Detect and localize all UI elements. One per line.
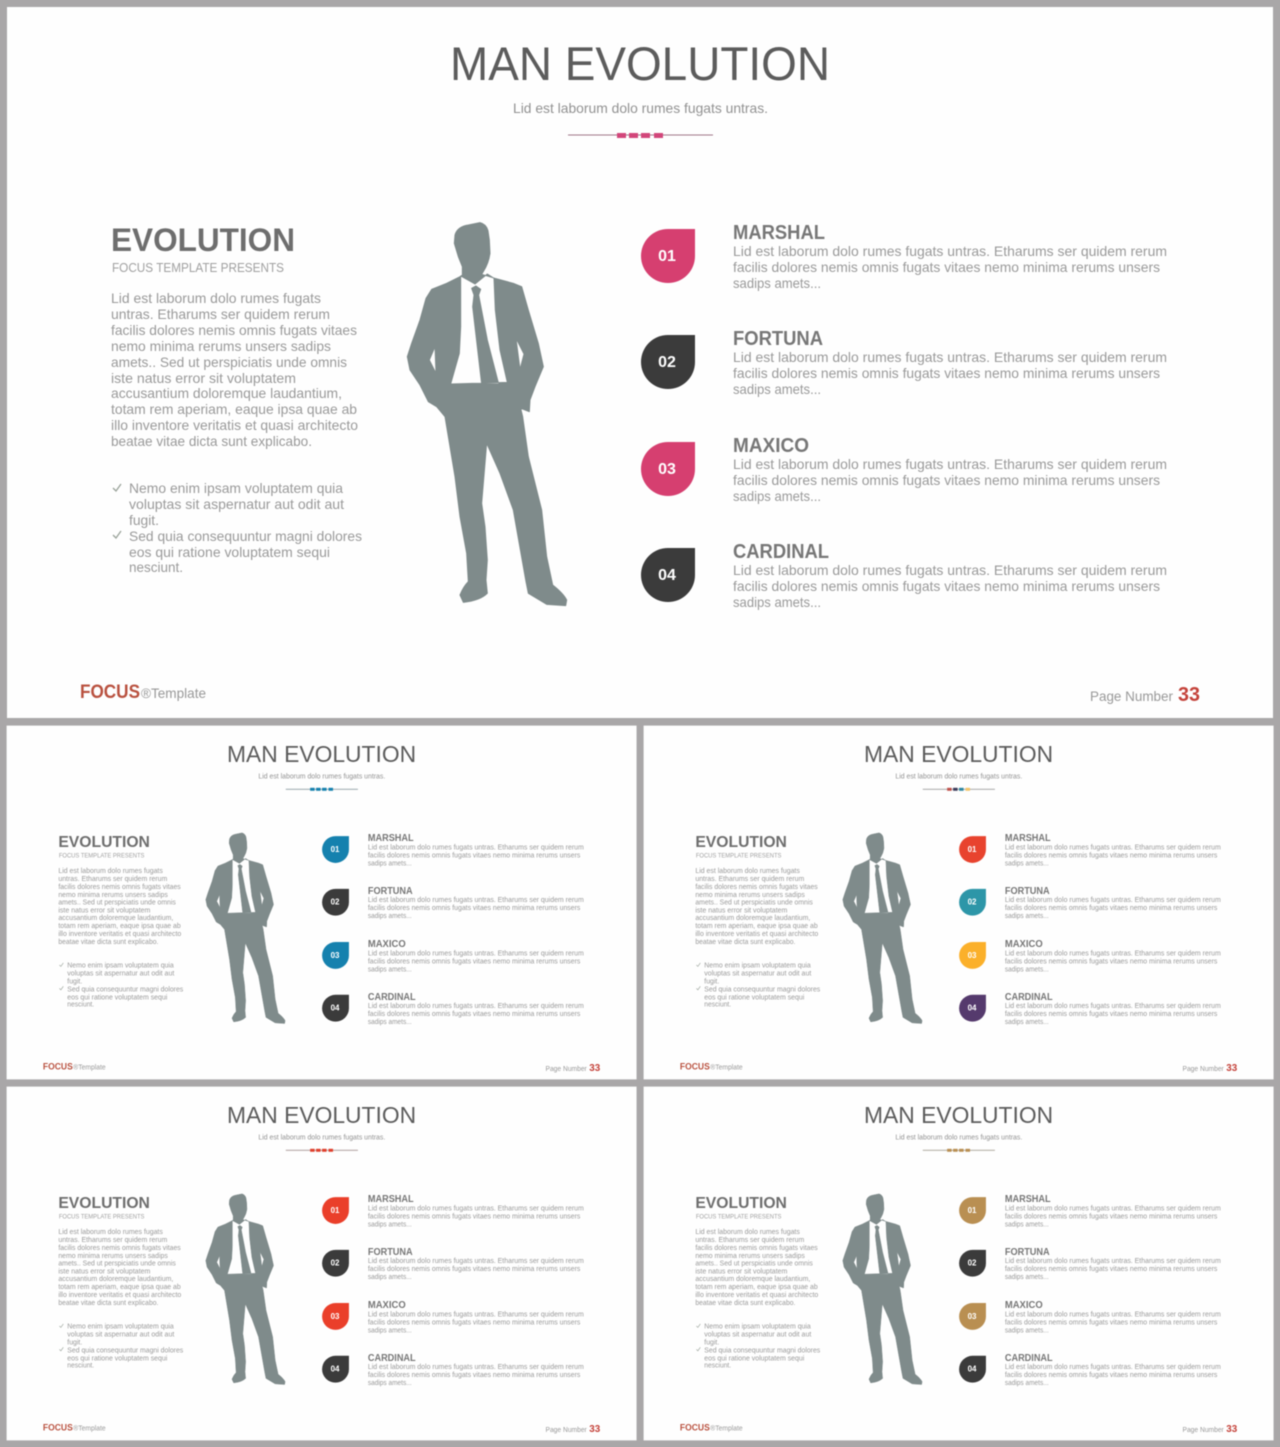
page number — [1090, 684, 1200, 706]
item 03: 03 — [331, 951, 340, 960]
item 03: Lid est laborum dolo rumes fugats untras. Etharums ser quidem rerum — [733, 456, 1167, 472]
item 04: CARDINAL — [368, 1353, 416, 1364]
item 01: facilis dolores nemis omnis fugats vitaes nemo minima rerums unsers — [1005, 852, 1218, 859]
heading: evolution: EVOLUTION — [58, 1195, 150, 1212]
item 01 — [641, 222, 1167, 291]
checklist: voluptas sit aspernatur aut odit aut — [704, 970, 811, 977]
item 02: facilis dolores nemis omnis fugats vitaes nemo minima rerums unsers — [1005, 1266, 1218, 1273]
item 03: facilis dolores nemis omnis fugats vitaes nemo minima rerums unsers — [368, 958, 581, 965]
paragraph: totam rem aperiam, eaque ipsa quae ab — [58, 923, 181, 930]
item 02: facilis dolores nemis omnis fugats vitaes nemo minima rerums unsers — [368, 905, 581, 912]
footer brand: FOCUS — [43, 1061, 73, 1072]
item 02 — [322, 886, 584, 920]
item 04 — [322, 1353, 584, 1387]
item 03: 03 — [331, 1312, 340, 1321]
item 02: 02 — [658, 354, 676, 371]
item 02: Lid est laborum dolo rumes fugats untras. Etharums ser quidem rerum — [733, 349, 1167, 365]
item 03: facilis dolores nemis omnis fugats vitaes nemo minima rerums unsers — [1005, 958, 1218, 965]
page number: Page Number — [1090, 688, 1173, 704]
item 03: sadips amets... — [1005, 966, 1049, 973]
checklist: Sed quia consequuntur magni dolores — [704, 986, 821, 993]
paragraph: facilis dolores nemis omnis fugats vitaes — [111, 322, 357, 338]
item 02: FORTUNA — [368, 1247, 413, 1258]
page number — [546, 1063, 601, 1074]
item 04 — [322, 992, 584, 1026]
item 03 — [959, 1300, 1221, 1334]
item 02: sadips amets... — [1005, 913, 1049, 920]
item 01: Lid est laborum dolo rumes fugats untras. Etharums ser quidem rerum — [1005, 845, 1221, 852]
footer brand: FOCUS — [680, 1061, 710, 1072]
checklist — [59, 1323, 184, 1370]
item 04: 04 — [331, 1365, 340, 1374]
paragraph: beatae vitae dicta sunt explicabo. — [695, 1300, 795, 1307]
page number — [1183, 1063, 1238, 1074]
footer brand: FOCUS — [680, 1422, 710, 1433]
item 04: CARDINAL — [733, 541, 829, 563]
sub-heading: FOCUS TEMPLATE PRESENTS — [59, 1213, 145, 1220]
icon: man silhouette — [843, 1194, 922, 1384]
checklist: nesciunt. — [704, 1363, 731, 1370]
page number — [546, 1424, 601, 1435]
paragraph: nemo minima rerums unsers sadips — [111, 338, 331, 354]
item 03: Lid est laborum dolo rumes fugats untras. Etharums ser quidem rerum — [368, 1311, 584, 1318]
checklist: Sed quia consequuntur magni dolores — [129, 528, 362, 544]
paragraph: accusantium doloremque laudantium, — [695, 1276, 810, 1283]
item 04: 04 — [658, 567, 676, 584]
panel: brown slide — [644, 1087, 1274, 1440]
page number: Page Number — [1183, 1427, 1224, 1434]
paragraph — [58, 1229, 181, 1307]
item 04: sadips amets... — [1005, 1380, 1049, 1387]
item 03: Lid est laborum dolo rumes fugats untras. Etharums ser quidem rerum — [1005, 1311, 1221, 1318]
item 04: CARDINAL — [368, 992, 416, 1003]
checklist: Sed quia consequuntur magni dolores — [67, 986, 184, 993]
paragraph: iste natus error sit voluptatem — [695, 1269, 788, 1276]
checklist: fugit. — [704, 978, 719, 985]
item 04: Lid est laborum dolo rumes fugats untras. Etharums ser quidem rerum — [1005, 1003, 1221, 1010]
page number: 33 — [1178, 684, 1200, 706]
paragraph: accusantium doloremque laudantium, — [111, 385, 342, 401]
paragraph: illo inventore veritatis et quasi architecto — [695, 931, 818, 938]
item 02: 02 — [968, 898, 977, 907]
item 01: MARSHAL — [368, 1194, 414, 1205]
item 03: MAXICO — [1005, 1300, 1043, 1311]
item 04: Lid est laborum dolo rumes fugats untras. Etharums ser quidem rerum — [368, 1003, 584, 1010]
footer brand: FOCUS — [43, 1422, 73, 1433]
paragraph: untras. Etharums ser quidem rerum — [58, 1237, 168, 1244]
paragraph — [111, 290, 358, 449]
item 01 — [959, 833, 1221, 867]
paragraph: beatae vitae dicta sunt explicabo. — [111, 433, 312, 449]
footer brand — [680, 1061, 743, 1072]
footer brand — [80, 682, 206, 703]
item 04: Lid est laborum dolo rumes fugats untras. Etharums ser quidem rerum — [1005, 1364, 1221, 1371]
title divider — [286, 788, 358, 791]
paragraph: untras. Etharums ser quidem rerum — [111, 306, 330, 322]
footer brand: ®Template — [710, 1063, 743, 1071]
item 01: Lid est laborum dolo rumes fugats untras. Etharums ser quidem rerum — [368, 845, 584, 852]
paragraph — [695, 1229, 818, 1307]
item 01: facilis dolores nemis omnis fugats vitaes nemo minima rerums unsers — [368, 852, 581, 859]
paragraph: iste natus error sit voluptatem — [58, 1269, 151, 1276]
icon: man silhouette — [407, 223, 567, 606]
paragraph: amets.. Sed ut perspiciatis unde omnis — [695, 1261, 813, 1268]
item 03 — [322, 939, 584, 973]
paragraph: illo inventore veritatis et quasi architecto — [58, 931, 181, 938]
item 03 — [641, 435, 1167, 504]
paragraph: amets.. Sed ut perspiciatis unde omnis — [111, 354, 347, 370]
footer brand — [43, 1422, 106, 1433]
item 04: facilis dolores nemis omnis fugats vitaes nemo minima rerums unsers — [368, 1372, 581, 1379]
item 01: sadips amets... — [733, 275, 821, 291]
footer brand: FOCUS — [80, 682, 140, 703]
footer brand — [43, 1061, 106, 1072]
paragraph: illo inventore veritatis et quasi architecto — [695, 1292, 818, 1299]
heading: evolution: EVOLUTION — [111, 222, 295, 258]
panel: red slide — [7, 1087, 637, 1440]
item 01: MARSHAL — [368, 833, 414, 844]
item 01: facilis dolores nemis omnis fugats vitaes nemo minima rerums unsers — [1005, 1213, 1218, 1220]
checklist: nesciunt. — [67, 1363, 94, 1370]
item 04: facilis dolores nemis omnis fugats vitaes nemo minima rerums unsers — [733, 578, 1160, 594]
checklist: voluptas sit aspernatur aut odit aut — [704, 1331, 811, 1338]
item 03: sadips amets... — [1005, 1327, 1049, 1334]
sub-heading: FOCUS TEMPLATE PRESENTS — [112, 260, 284, 275]
title: MAN EVOLUTION — [227, 741, 416, 767]
item 01: 01 — [658, 248, 676, 265]
checklist: Nemo enim ipsam voluptatem quia — [704, 962, 811, 969]
heading: evolution: EVOLUTION — [695, 1195, 787, 1212]
item 02 — [641, 328, 1167, 397]
paragraph: facilis dolores nemis omnis fugats vitaes — [695, 884, 818, 891]
page number: 33 — [589, 1063, 601, 1074]
paragraph: beatae vitae dicta sunt explicabo. — [58, 1300, 158, 1307]
paragraph: facilis dolores nemis omnis fugats vitaes — [58, 1245, 181, 1252]
item 03: facilis dolores nemis omnis fugats vitaes nemo minima rerums unsers — [733, 472, 1160, 488]
paragraph: Lid est laborum dolo rumes fugats — [695, 868, 800, 875]
page number: 33 — [589, 1424, 601, 1435]
checklist: voluptas sit aspernatur aut odit aut — [67, 970, 174, 977]
item 04: facilis dolores nemis omnis fugats vitaes nemo minima rerums unsers — [1005, 1011, 1218, 1018]
item 04: facilis dolores nemis omnis fugats vitaes nemo minima rerums unsers — [368, 1011, 581, 1018]
item 01 — [322, 1194, 584, 1228]
panel: multicolour slide — [644, 726, 1274, 1079]
item 03 — [959, 939, 1221, 973]
checklist: nesciunt. — [704, 1002, 731, 1009]
paragraph: nemo minima rerums unsers sadips — [695, 892, 805, 899]
checklist: fugit. — [67, 1339, 82, 1346]
checklist — [696, 1323, 821, 1370]
paragraph — [695, 868, 818, 946]
title: MAN EVOLUTION — [450, 37, 830, 90]
item 01: MARSHAL — [1005, 833, 1051, 844]
item 04 — [641, 541, 1167, 610]
footer brand: ®Template — [141, 685, 206, 701]
item 02: FORTUNA — [1005, 886, 1050, 897]
sub-heading: FOCUS TEMPLATE PRESENTS — [59, 852, 145, 859]
paragraph: iste natus error sit voluptatem — [111, 370, 296, 386]
checklist: voluptas sit aspernatur aut odit aut — [129, 496, 344, 512]
page number: 33 — [1226, 1063, 1238, 1074]
paragraph: Lid est laborum dolo rumes fugats — [58, 1229, 163, 1236]
footer brand: ®Template — [710, 1424, 743, 1432]
title divider — [568, 133, 713, 138]
icon: man silhouette — [206, 1194, 285, 1384]
item 02: Lid est laborum dolo rumes fugats untras. Etharums ser quidem rerum — [368, 1258, 584, 1265]
checklist: eos qui ratione voluptatem sequi — [129, 544, 330, 560]
footer brand: ®Template — [73, 1424, 106, 1432]
checklist: Sed quia consequuntur magni dolores — [704, 1347, 821, 1354]
title divider — [923, 1149, 995, 1152]
sub-heading: FOCUS TEMPLATE PRESENTS — [696, 1213, 782, 1220]
checklist: eos qui ratione voluptatem sequi — [704, 1355, 805, 1362]
paragraph: accusantium doloremque laudantium, — [58, 915, 173, 922]
paragraph: facilis dolores nemis omnis fugats vitaes — [695, 1245, 818, 1252]
page number: Page Number — [546, 1066, 587, 1073]
heading: evolution: EVOLUTION — [695, 834, 787, 851]
item 03: sadips amets... — [368, 966, 412, 973]
item 04: sadips amets... — [368, 1019, 412, 1026]
item 01: 01 — [968, 845, 977, 854]
item 01: Lid est laborum dolo rumes fugats untras. Etharums ser quidem rerum — [733, 243, 1167, 259]
item 01 — [322, 833, 584, 867]
item 04: Lid est laborum dolo rumes fugats untras. Etharums ser quidem rerum — [733, 562, 1167, 578]
item 01: Lid est laborum dolo rumes fugats untras. Etharums ser quidem rerum — [368, 1206, 584, 1213]
checklist — [59, 962, 184, 1009]
item 02: Lid est laborum dolo rumes fugats untras. Etharums ser quidem rerum — [1005, 897, 1221, 904]
subtitle: Lid est laborum dolo rumes fugats untras. — [895, 773, 1022, 780]
item 01: sadips amets... — [368, 860, 412, 867]
subtitle: Lid est laborum dolo rumes fugats untras. — [513, 100, 768, 116]
sub-heading: FOCUS TEMPLATE PRESENTS — [696, 852, 782, 859]
item 03 — [322, 1300, 584, 1334]
item 04: facilis dolores nemis omnis fugats vitaes nemo minima rerums unsers — [1005, 1372, 1218, 1379]
item 02: FORTUNA — [1005, 1247, 1050, 1258]
paragraph: totam rem aperiam, eaque ipsa quae ab — [58, 1284, 181, 1291]
page number: 33 — [1226, 1424, 1238, 1435]
paragraph: accusantium doloremque laudantium, — [58, 1276, 173, 1283]
item 01: sadips amets... — [368, 1221, 412, 1228]
panel: main slide (pink) — [7, 7, 1273, 718]
item 02 — [959, 886, 1221, 920]
item 02: sadips amets... — [1005, 1274, 1049, 1281]
item 03: MAXICO — [733, 435, 809, 457]
title divider — [286, 1149, 358, 1152]
item 01: 01 — [331, 845, 340, 854]
item 02: 02 — [331, 898, 340, 907]
item 01: MARSHAL — [1005, 1194, 1051, 1205]
paragraph: totam rem aperiam, eaque ipsa quae ab — [695, 1284, 818, 1291]
paragraph: nemo minima rerums unsers sadips — [58, 1253, 168, 1260]
item 03: MAXICO — [368, 939, 406, 950]
item 02: sadips amets... — [368, 913, 412, 920]
item 03: MAXICO — [1005, 939, 1043, 950]
item 04: Lid est laborum dolo rumes fugats untras. Etharums ser quidem rerum — [368, 1364, 584, 1371]
checklist: eos qui ratione voluptatem sequi — [67, 1355, 168, 1362]
icon: man silhouette — [206, 833, 285, 1023]
item 02: FORTUNA — [368, 886, 413, 897]
item 02: Lid est laborum dolo rumes fugats untras. Etharums ser quidem rerum — [368, 897, 584, 904]
title divider — [923, 788, 995, 791]
item 04 — [959, 992, 1221, 1026]
item 01: facilis dolores nemis omnis fugats vitaes nemo minima rerums unsers — [368, 1213, 581, 1220]
item 03: sadips amets... — [368, 1327, 412, 1334]
checklist: nesciunt. — [129, 559, 183, 575]
paragraph: beatae vitae dicta sunt explicabo. — [695, 939, 795, 946]
paragraph: Lid est laborum dolo rumes fugats — [111, 290, 321, 306]
item 01 — [959, 1194, 1221, 1228]
item 04: sadips amets... — [733, 594, 821, 610]
item 03: 03 — [968, 951, 977, 960]
item 03: facilis dolores nemis omnis fugats vitaes nemo minima rerums unsers — [368, 1319, 581, 1326]
checklist: fugit. — [129, 512, 159, 528]
item 03: Lid est laborum dolo rumes fugats untras. Etharums ser quidem rerum — [1005, 950, 1221, 957]
title: MAN EVOLUTION — [864, 1102, 1053, 1128]
item 03: sadips amets... — [733, 488, 821, 504]
item 03: 03 — [658, 461, 676, 478]
item 02 — [959, 1247, 1221, 1281]
item 01: 01 — [968, 1206, 977, 1215]
paragraph: totam rem aperiam, eaque ipsa quae ab — [111, 401, 357, 417]
item 03: MAXICO — [368, 1300, 406, 1311]
checklist — [696, 962, 821, 1009]
checklist — [113, 480, 362, 575]
paragraph: iste natus error sit voluptatem — [695, 908, 788, 915]
checklist: Nemo enim ipsam voluptatem quia — [67, 1323, 174, 1330]
item 02: sadips amets... — [368, 1274, 412, 1281]
heading: evolution: EVOLUTION — [58, 834, 150, 851]
title: MAN EVOLUTION — [227, 1102, 416, 1128]
icon: man silhouette — [843, 833, 922, 1023]
panel: blue slide — [7, 726, 637, 1079]
paragraph: untras. Etharums ser quidem rerum — [695, 876, 805, 883]
paragraph: facilis dolores nemis omnis fugats vitaes — [58, 884, 181, 891]
checklist: eos qui ratione voluptatem sequi — [67, 994, 168, 1001]
item 02 — [322, 1247, 584, 1281]
paragraph: Lid est laborum dolo rumes fugats — [695, 1229, 800, 1236]
paragraph: beatae vitae dicta sunt explicabo. — [58, 939, 158, 946]
item 02: 02 — [331, 1259, 340, 1268]
item 04: CARDINAL — [1005, 992, 1053, 1003]
item 04: 04 — [968, 1365, 977, 1374]
paragraph: amets.. Sed ut perspiciatis unde omnis — [58, 900, 176, 907]
checklist: Nemo enim ipsam voluptatem quia — [704, 1323, 811, 1330]
item 04: sadips amets... — [368, 1380, 412, 1387]
title: MAN EVOLUTION — [864, 741, 1053, 767]
paragraph: nemo minima rerums unsers sadips — [58, 892, 168, 899]
paragraph: accusantium doloremque laudantium, — [695, 915, 810, 922]
checklist: nesciunt. — [67, 1002, 94, 1009]
checklist: fugit. — [67, 978, 82, 985]
page number — [1183, 1424, 1238, 1435]
footer brand — [680, 1422, 743, 1433]
paragraph: untras. Etharums ser quidem rerum — [695, 1237, 805, 1244]
subtitle: Lid est laborum dolo rumes fugats untras. — [258, 773, 385, 780]
item 01: 01 — [331, 1206, 340, 1215]
paragraph — [58, 868, 181, 946]
item 02: facilis dolores nemis omnis fugats vitaes nemo minima rerums unsers — [1005, 905, 1218, 912]
item 04 — [959, 1353, 1221, 1387]
paragraph: illo inventore veritatis et quasi architecto — [58, 1292, 181, 1299]
item 02: sadips amets... — [733, 381, 821, 397]
item 01: sadips amets... — [1005, 860, 1049, 867]
item 04: sadips amets... — [1005, 1019, 1049, 1026]
paragraph: amets.. Sed ut perspiciatis unde omnis — [695, 900, 813, 907]
item 04: CARDINAL — [1005, 1353, 1053, 1364]
item 03: Lid est laborum dolo rumes fugats untras. Etharums ser quidem rerum — [368, 950, 584, 957]
item 01: facilis dolores nemis omnis fugats vitaes nemo minima rerums unsers — [733, 259, 1160, 275]
page number: Page Number — [1183, 1066, 1224, 1073]
checklist: Nemo enim ipsam voluptatem quia — [129, 480, 343, 496]
checklist: fugit. — [704, 1339, 719, 1346]
paragraph: totam rem aperiam, eaque ipsa quae ab — [695, 923, 818, 930]
checklist: Nemo enim ipsam voluptatem quia — [67, 962, 174, 969]
item 02: 02 — [968, 1259, 977, 1268]
item 02: Lid est laborum dolo rumes fugats untras. Etharums ser quidem rerum — [1005, 1258, 1221, 1265]
item 03: 03 — [968, 1312, 977, 1321]
item 03: facilis dolores nemis omnis fugats vitaes nemo minima rerums unsers — [1005, 1319, 1218, 1326]
item 01: MARSHAL — [733, 222, 825, 244]
subtitle: Lid est laborum dolo rumes fugats untras. — [895, 1134, 1022, 1141]
checklist: voluptas sit aspernatur aut odit aut — [67, 1331, 174, 1338]
paragraph: iste natus error sit voluptatem — [58, 908, 151, 915]
item 02: FORTUNA — [733, 328, 823, 350]
checklist: eos qui ratione voluptatem sequi — [704, 994, 805, 1001]
paragraph: amets.. Sed ut perspiciatis unde omnis — [58, 1261, 176, 1268]
paragraph: nemo minima rerums unsers sadips — [695, 1253, 805, 1260]
item 02: facilis dolores nemis omnis fugats vitaes nemo minima rerums unsers — [368, 1266, 581, 1273]
page number: Page Number — [546, 1427, 587, 1434]
paragraph: untras. Etharums ser quidem rerum — [58, 876, 168, 883]
item 02: facilis dolores nemis omnis fugats vitaes nemo minima rerums unsers — [733, 365, 1160, 381]
paragraph: illo inventore veritatis et quasi architecto — [111, 417, 358, 433]
checklist: Sed quia consequuntur magni dolores — [67, 1347, 184, 1354]
footer brand: ®Template — [73, 1063, 106, 1071]
item 04: 04 — [968, 1004, 977, 1013]
item 01: Lid est laborum dolo rumes fugats untras. Etharums ser quidem rerum — [1005, 1206, 1221, 1213]
subtitle: Lid est laborum dolo rumes fugats untras. — [258, 1134, 385, 1141]
paragraph: Lid est laborum dolo rumes fugats — [58, 868, 163, 875]
item 01: sadips amets... — [1005, 1221, 1049, 1228]
item 04: 04 — [331, 1004, 340, 1013]
